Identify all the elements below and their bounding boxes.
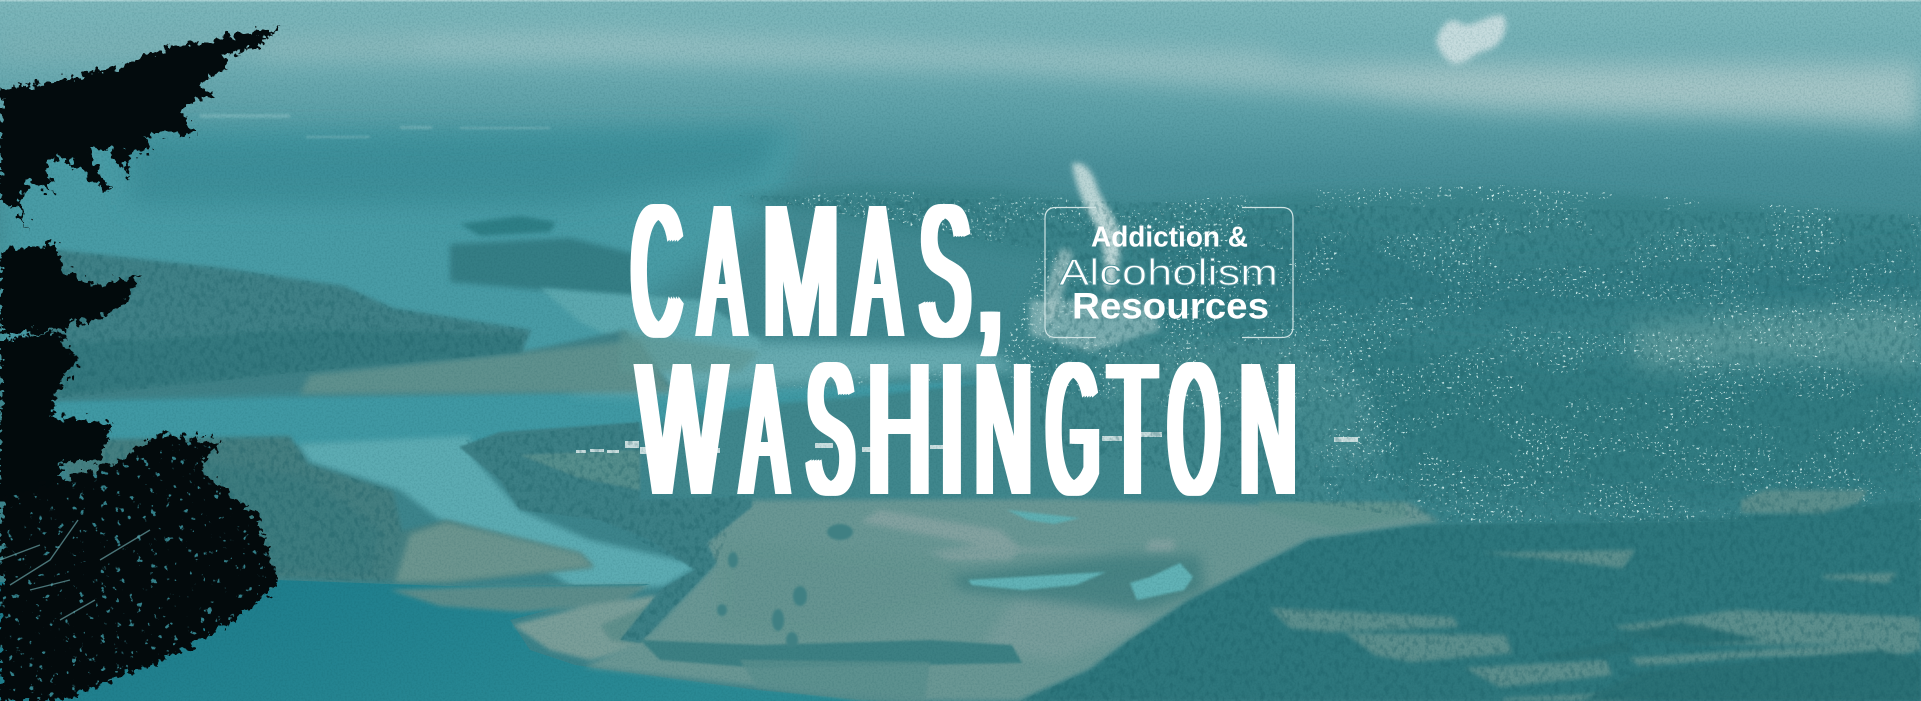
left peninsula and marsh [20, 250, 760, 400]
title line: CAMAS,: C [632, 166, 681, 377]
title line: WASHINGTON [633, 324, 1296, 535]
lit twigs in lower bough [0, 520, 150, 620]
title line: WASHINGTON: O [1169, 324, 1219, 535]
forest texture [52, 195, 1921, 701]
badge: Addiction & Alcoholism Resources [1044, 206, 1294, 338]
evergreen branches in the foreground [0, 0, 300, 701]
upper field by hills [1259, 502, 1406, 530]
top branch [0, 28, 283, 232]
title line: WASHINGTON: H [868, 324, 931, 535]
foliage gaps in lower bough [0, 442, 276, 701]
central farm field [584, 498, 1440, 701]
title line: WASHINGTON: N [1240, 324, 1296, 535]
lower large bough [0, 434, 280, 701]
haze band [0, 32, 1921, 128]
title line: CAMAS,: , [976, 162, 1004, 373]
title line: CAMAS,: S [920, 166, 970, 377]
sand spits [390, 585, 680, 660]
title line: WASHINGTON: G [1047, 324, 1099, 535]
land behind Washington lettering [640, 385, 1330, 500]
title line: WASHINGTON: S [807, 324, 854, 535]
title: CAMAS, WASHINGTON [630, 162, 1296, 535]
badge outline with gaps [1045, 208, 1293, 338]
title line: WASHINGTON: W [638, 324, 726, 535]
title line: CAMAS,: A [855, 166, 900, 377]
south island [60, 436, 594, 583]
title line: WASHINGTON: T [1109, 324, 1156, 535]
title line: CAMAS,: A [700, 166, 744, 377]
ponds [950, 510, 1205, 612]
badge line: Resources: Resources [1072, 285, 1269, 326]
lower lake [0, 580, 880, 701]
badge line: Addiction &: Addiction & [1091, 222, 1248, 254]
town lights [752, 185, 1921, 524]
lower right forest [1020, 500, 1921, 701]
lower right tree clumps [1540, 622, 1921, 701]
river-bank forest [459, 422, 1022, 701]
title line: WASHINGTON: I [940, 324, 964, 535]
title line: CAMAS, [630, 162, 1004, 377]
far left water and distant shore [0, 114, 800, 380]
top edge highlight [0, 0, 1921, 2]
city buildings along the river [576, 432, 1358, 454]
small cloud [1436, 15, 1506, 64]
mid-river water [30, 340, 1020, 592]
north hills forest [640, 184, 1921, 540]
smoke plume [1030, 163, 1160, 352]
title line: CAMAS,: M [762, 166, 839, 377]
third branch [0, 332, 112, 510]
title line: WASHINGTON: A [742, 324, 787, 535]
title line: WASHINGTON: N [975, 324, 1032, 535]
second branch [0, 244, 141, 334]
badge line: Alcoholism: Alcoholism [1059, 252, 1278, 293]
field trees [717, 524, 853, 648]
patchwork fields [1270, 490, 1921, 701]
